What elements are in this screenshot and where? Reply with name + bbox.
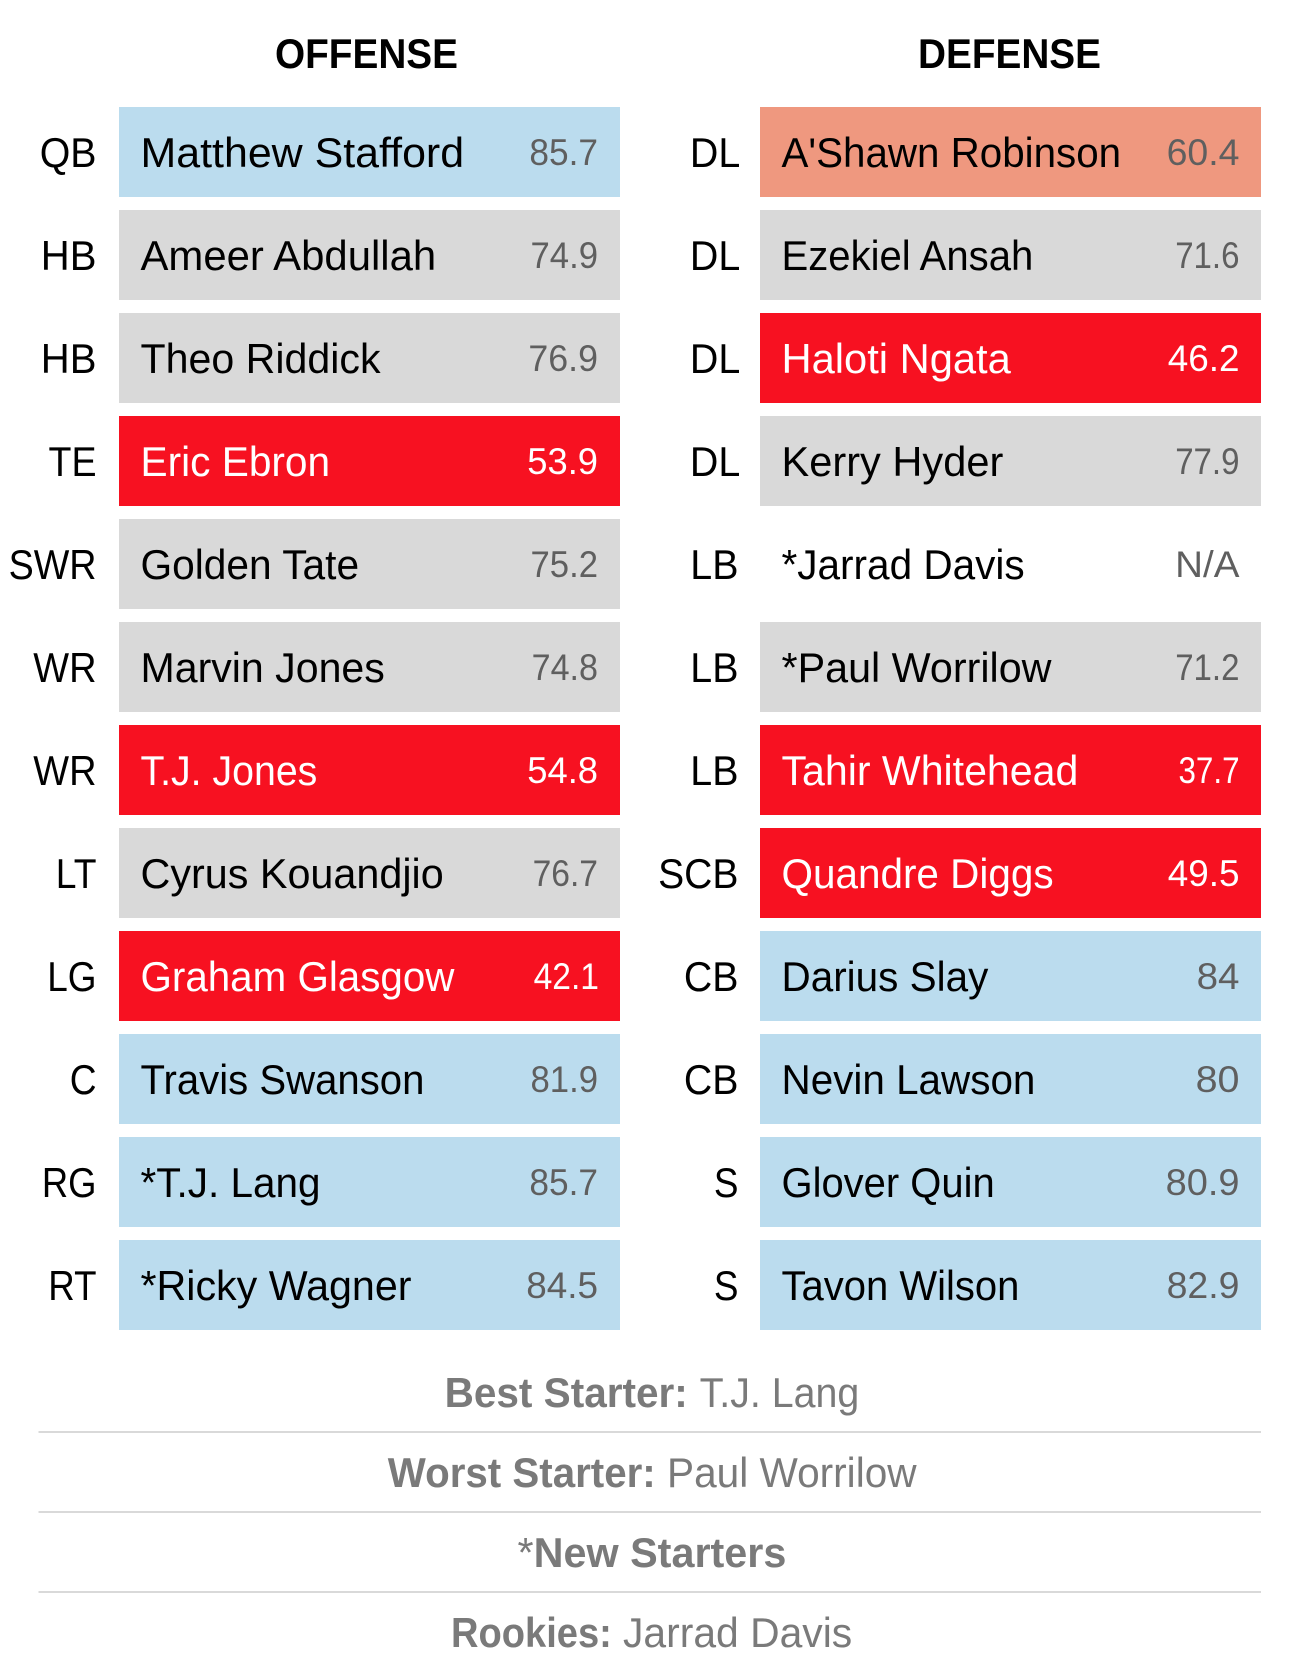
row: LB Paul Worrilow: *Paul Worrilow	[782, 644, 1052, 691]
row: HB Ameer Abdullah	[41, 210, 620, 300]
row: DL A'Shawn Robinson: 60.4	[1167, 132, 1240, 173]
row: QB Matthew Stafford: QB	[40, 129, 96, 176]
row: WR T.J. Jones	[33, 725, 620, 815]
row: LG Graham Glasgow	[47, 931, 620, 1021]
row: LB Tahir Whitehead	[690, 725, 1261, 815]
row: C Travis Swanson: 81.9	[530, 1059, 598, 1100]
row: SCB Quandre Diggs	[658, 828, 1261, 918]
row: RG T.J. Lang	[42, 1137, 620, 1227]
row: LB Jarrad Davis: *Jarrad Davis	[782, 541, 1025, 588]
row: CB Darius Slay: 84	[1197, 956, 1240, 997]
row: SWR Golden Tate	[9, 519, 620, 609]
row: CB Nevin Lawson: Nevin Lawson	[782, 1056, 1035, 1103]
row: DL Kerry Hyder: DL	[690, 438, 740, 485]
row: HB Theo Riddick: HB	[41, 335, 96, 382]
row: WR T.J. Jones: WR	[33, 747, 96, 794]
row: WR Marvin Jones: Marvin Jones	[140, 644, 385, 691]
row: SCB Quandre Diggs: Quandre Diggs	[782, 850, 1054, 897]
row: LG Graham Glasgow: LG	[47, 953, 96, 1000]
heading: offense: OFFENSE	[275, 30, 458, 77]
row: LB Jarrad Davis: N/A	[1175, 544, 1240, 585]
row: WR Marvin Jones: 74.8	[532, 647, 598, 688]
row: TE Eric Ebron: TE	[48, 438, 96, 485]
note: rookies: Rookies:	[451, 1609, 612, 1656]
row: S Glover Quin: Glover Quin	[782, 1159, 995, 1206]
row: HB Ameer Abdullah: 74.9	[530, 235, 598, 276]
row: RT Ricky Wagner	[48, 1240, 620, 1330]
notes block	[38, 1369, 1261, 1656]
row: DL Kerry Hyder: 77.9	[1175, 441, 1240, 482]
row: HB Theo Riddick	[41, 313, 620, 403]
row: DL Ezekiel Ansah: Ezekiel Ansah	[782, 232, 1033, 279]
row: SCB Quandre Diggs: SCB	[658, 850, 738, 897]
row: RG T.J. Lang: RG	[42, 1159, 96, 1206]
row: S Tavon Wilson	[714, 1240, 1261, 1330]
row: TE Eric Ebron	[48, 416, 620, 506]
row: TE Eric Ebron: Eric Ebron	[140, 438, 330, 485]
note: worst starter: Paul Worrilow	[667, 1449, 917, 1496]
row: LG Graham Glasgow: Graham Glasgow	[140, 953, 455, 1000]
row: WR T.J. Jones: 54.8	[527, 750, 598, 791]
row: CB Darius Slay: CB	[684, 953, 738, 1000]
row: DL Kerry Hyder: Kerry Hyder	[782, 438, 1003, 485]
note: best starter: T.J. Lang	[700, 1369, 859, 1416]
row: RT Ricky Wagner: 84.5	[526, 1265, 598, 1306]
row: SWR Golden Tate: 75.2	[530, 544, 598, 585]
row: QB Matthew Stafford	[40, 107, 620, 197]
row: HB Theo Riddick: Theo Riddick	[140, 335, 381, 382]
row: WR Marvin Jones	[33, 622, 620, 712]
row: DL Ezekiel Ansah: DL	[690, 232, 740, 279]
row: CB Nevin Lawson	[684, 1034, 1261, 1124]
panel: defense roster	[658, 107, 1261, 1330]
heading: defense: DEFENSE	[918, 30, 1101, 77]
row: HB Theo Riddick: 76.9	[528, 338, 598, 379]
row: S Glover Quin: 80.9	[1166, 1162, 1240, 1203]
row: SWR Golden Tate: Golden Tate	[140, 541, 359, 588]
row: DL A'Shawn Robinson	[690, 107, 1261, 197]
note: best starter	[445, 1369, 859, 1416]
row: LB Tahir Whitehead: LB	[690, 747, 738, 794]
row: LB Jarrad Davis: LB	[690, 541, 738, 588]
row: LB Paul Worrilow: 71.2	[1175, 647, 1240, 688]
row: DL Haloti Ngata: DL	[690, 335, 740, 382]
note: rookies: Jarrad Davis	[623, 1609, 852, 1656]
row: RT Ricky Wagner: *Ricky Wagner	[140, 1262, 412, 1309]
row: QB Matthew Stafford: Matthew Stafford	[140, 129, 464, 176]
row: QB Matthew Stafford: 85.7	[529, 132, 598, 173]
note: rookies	[451, 1609, 852, 1656]
row: DL Haloti Ngata	[690, 313, 1261, 403]
row: LT Cyrus Kouandjio	[56, 828, 620, 918]
row: HB Ameer Abdullah: HB	[41, 232, 96, 279]
row: CB Nevin Lawson: 80	[1196, 1059, 1240, 1100]
note: best starter: Best Starter:	[445, 1369, 688, 1416]
row: CB Darius Slay	[684, 931, 1261, 1021]
row: LB Paul Worrilow	[690, 622, 1261, 712]
row: CB Darius Slay: Darius Slay	[782, 953, 988, 1000]
panel: offense roster	[9, 107, 620, 1330]
row: S Tavon Wilson: S	[714, 1262, 738, 1309]
row: DL Haloti Ngata: 46.2	[1168, 338, 1240, 379]
row: WR T.J. Jones: T.J. Jones	[140, 747, 317, 794]
row: LB Tahir Whitehead: Tahir Whitehead	[782, 747, 1078, 794]
row: CB Nevin Lawson: CB	[684, 1056, 738, 1103]
row: TE Eric Ebron: 53.9	[527, 441, 598, 482]
note: worst starter: Worst Starter:	[388, 1449, 656, 1496]
row: DL Kerry Hyder	[690, 416, 1261, 506]
row: S Tavon Wilson: Tavon Wilson	[782, 1262, 1019, 1309]
row: RG T.J. Lang: 85.7	[529, 1162, 598, 1203]
row: C Travis Swanson: C	[70, 1056, 96, 1103]
row: LB Tahir Whitehead: 37.7	[1178, 750, 1240, 791]
row: RT Ricky Wagner: RT	[48, 1262, 96, 1309]
row: SCB Quandre Diggs: 49.5	[1168, 853, 1240, 894]
row: C Travis Swanson	[70, 1034, 620, 1124]
row: DL Ezekiel Ansah: 71.6	[1175, 235, 1240, 276]
row: S Tavon Wilson: 82.9	[1167, 1265, 1240, 1306]
row: S Glover Quin: S	[714, 1159, 738, 1206]
row: WR Marvin Jones: WR	[33, 644, 96, 691]
row: S Glover Quin	[714, 1137, 1261, 1227]
row: RG T.J. Lang: *T.J. Lang	[140, 1159, 320, 1206]
row: LB Jarrad Davis	[690, 541, 1240, 588]
row: LB Paul Worrilow: LB	[690, 644, 738, 691]
row: SWR Golden Tate: SWR	[9, 541, 97, 588]
row: DL Ezekiel Ansah	[690, 210, 1261, 300]
row: DL A'Shawn Robinson: A'Shawn Robinson	[782, 129, 1121, 176]
row: DL Haloti Ngata: Haloti Ngata	[782, 335, 1011, 382]
row: LT Cyrus Kouandjio: LT	[56, 850, 96, 897]
row: LT Cyrus Kouandjio: Cyrus Kouandjio	[140, 850, 444, 897]
row: HB Ameer Abdullah: Ameer Abdullah	[140, 232, 436, 279]
row: C Travis Swanson: Travis Swanson	[140, 1056, 424, 1103]
row: LG Graham Glasgow: 42.1	[534, 956, 599, 997]
row: LT Cyrus Kouandjio: 76.7	[533, 853, 598, 894]
note: worst starter	[388, 1449, 917, 1496]
note: new starters: *New Starters	[518, 1529, 786, 1576]
row: DL A'Shawn Robinson: DL	[690, 129, 740, 176]
